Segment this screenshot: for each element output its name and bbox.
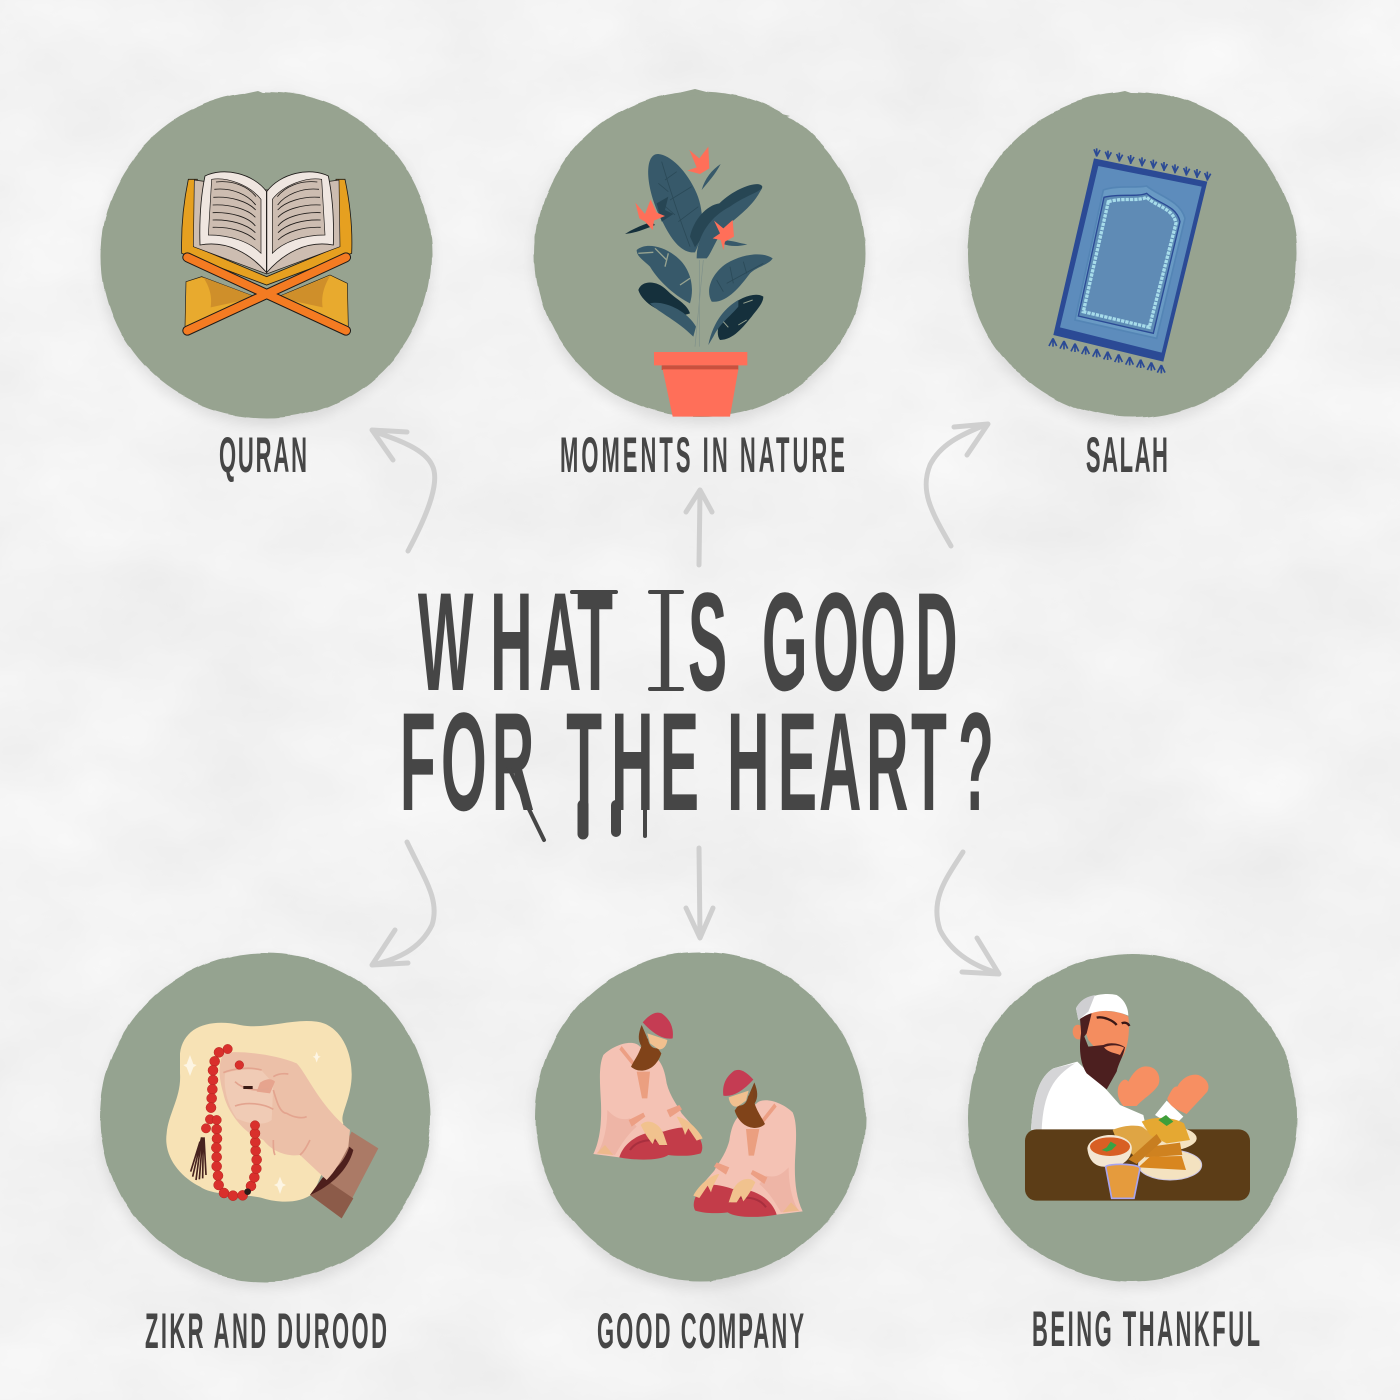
icon: open book on stand: [182, 172, 352, 331]
arrow: to Good Company: [686, 848, 713, 938]
icon: prayer rug: [1049, 148, 1211, 373]
panel: Being Thankful: [967, 953, 1297, 1287]
icon: hand with prayer beads: [166, 1021, 378, 1218]
label: Moments in Nature: MOMENTS IN NATURE: [560, 428, 845, 484]
label: Being Thankful: BEING THANKFUL: [1032, 1302, 1260, 1358]
circle: nature background: [535, 89, 865, 417]
title: [400, 564, 994, 840]
title: FOR THE HEART?: [400, 684, 994, 840]
panel: Moments in Nature: [535, 89, 865, 424]
icon: potted plant: [625, 147, 773, 417]
title details: long strokes below the second line and crossbars: [505, 592, 682, 840]
circle: Zikr background: [101, 953, 431, 1281]
panel: Salah: [967, 91, 1297, 424]
circle: Quran background: [101, 91, 431, 418]
arrow: to Being Thankful: [937, 852, 999, 974]
arrow: to Moments in Nature: [686, 490, 712, 565]
panel: Zikr and Durood: [101, 953, 431, 1287]
circle: company background: [535, 953, 865, 1282]
label: Good Company: GOOD COMPANY: [597, 1304, 804, 1360]
icon: two seated men: [593, 1013, 803, 1217]
panel: Quran: [101, 91, 431, 424]
arrow: to Quran: [372, 430, 435, 551]
circle: Salah background: [967, 91, 1297, 418]
label: Salah: SALAH: [1086, 428, 1168, 484]
label: Zikr and Durood: ZIKR AND DUROOD: [145, 1304, 387, 1360]
circle: thankful background: [967, 953, 1297, 1281]
arrow: to Zikr and Durood: [372, 842, 434, 965]
title: WHAT IS GOOD: [418, 564, 958, 720]
label: Quran: QURAN: [219, 428, 307, 484]
icon: man giving thanks over food: [1025, 994, 1250, 1201]
panel: Good Company: [535, 953, 865, 1287]
arrow: to Salah: [926, 424, 988, 546]
